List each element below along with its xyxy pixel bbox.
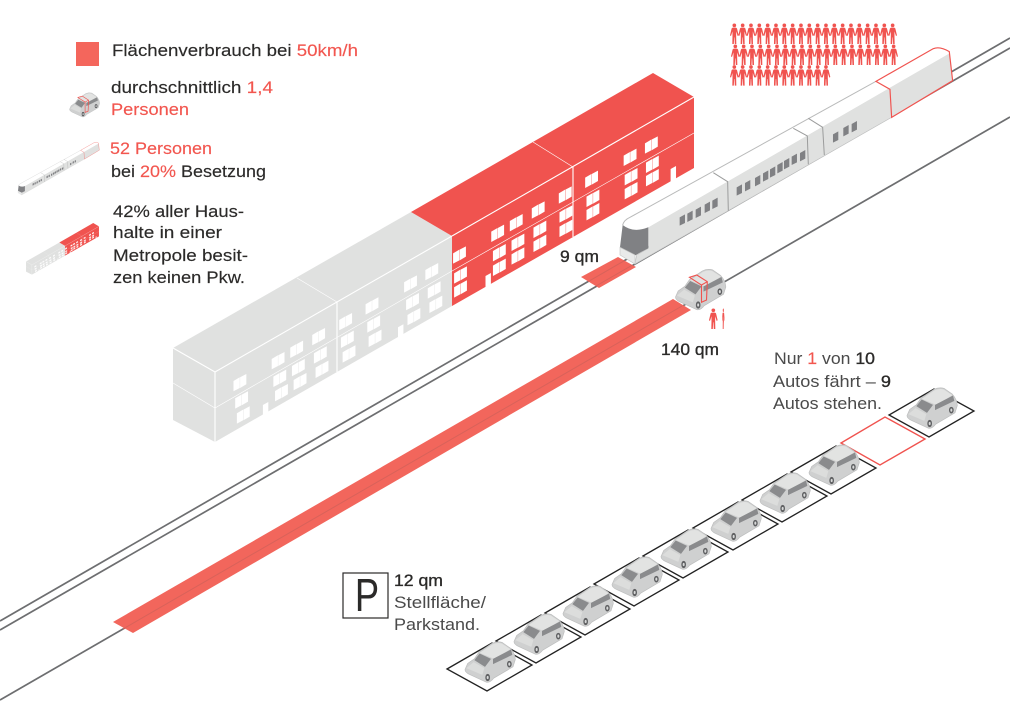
legend text: households without car: zen keinen Pkw. — [113, 268, 245, 287]
text: parking space size: Parkstand. — [394, 615, 480, 634]
legend text: households without car: 42% aller Haus- — [113, 202, 244, 221]
legend swatch: land use — [76, 42, 99, 66]
callout: 1 of 10 cars drives — [773, 349, 891, 413]
icon: parking sign: P — [355, 569, 379, 621]
text: parking space size: 12 qm — [394, 571, 443, 590]
icon: parking sign — [343, 569, 388, 621]
parking slots with cars — [447, 388, 974, 691]
text: parking space size — [394, 571, 486, 634]
car on road — [676, 269, 726, 310]
label: 9 qm: 9 qm — [560, 247, 599, 266]
legend text: tram occupancy: 52 Personen — [110, 139, 212, 158]
callout: 1 of 10 cars drives: Autos stehen. — [773, 394, 882, 413]
legend text: car occupancy: Personen — [111, 100, 189, 119]
people grid: 52 persons — [730, 23, 898, 86]
tram — [620, 48, 953, 264]
legend icon: car — [70, 93, 100, 117]
legend text: tram occupancy: bei 20% Besetzung — [111, 162, 266, 181]
callout: 1 of 10 cars drives: Autos fährt – 9 — [773, 372, 891, 391]
legend text: households without car: Metropole besit- — [113, 246, 248, 265]
road land-use strip: 140 qm — [113, 299, 691, 633]
legend text: car occupancy: durchschnittlich 1,4 — [111, 78, 273, 97]
legend icon: tram — [18, 142, 99, 195]
legend text: land use at 50 km/h: Flächenverbrauch bei 50km/h — [112, 41, 358, 60]
legend text: households without car — [113, 202, 248, 287]
building row: gray and red parts — [173, 73, 694, 442]
callout: 1 of 10 cars drives: Nur 1 von 10 — [774, 349, 875, 368]
icon: car occupants — [709, 308, 725, 329]
legend text: households without car: halte in einer — [113, 223, 222, 242]
legend icon: building row — [26, 223, 99, 275]
legend text: car occupancy — [111, 78, 273, 119]
text: parking space size: Stellfläche/ — [394, 593, 486, 612]
legend text: tram occupancy — [110, 139, 266, 181]
tram land-use strip: 9 qm — [581, 257, 636, 288]
label: 140 qm: 140 qm — [661, 340, 719, 359]
